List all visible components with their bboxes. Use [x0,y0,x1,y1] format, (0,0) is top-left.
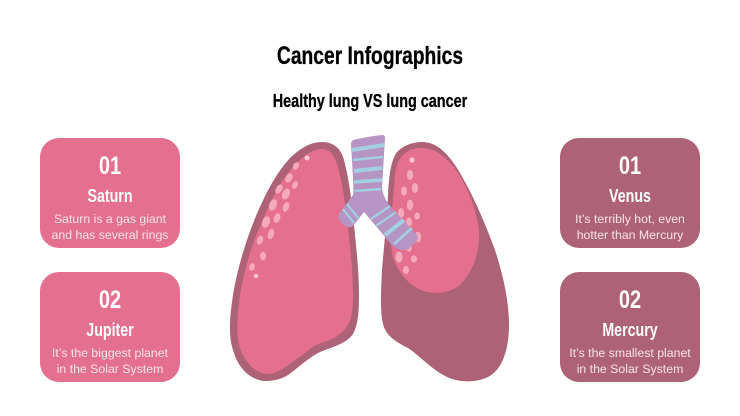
card: Jupiter [40,272,180,382]
number: 02 [619,286,641,314]
card: Venus [560,138,700,248]
description: It’s the smallest planet [569,346,691,360]
title: Cancer Infographics [277,42,463,70]
description [575,212,685,242]
right lung spots [395,157,421,274]
description: It’s terribly hot, even [575,212,685,226]
description [52,346,168,376]
description: It’s the biggest planet [52,346,168,360]
number: 01 [99,152,121,180]
card: Mercury [560,272,700,382]
name: Mercury [602,320,658,340]
number: 02 [99,286,121,314]
description: in the Solar System [577,362,683,376]
description: hotter than Mercury [577,228,683,242]
number: 01 [619,152,641,180]
name: Saturn [87,186,133,206]
diseased right lung [381,142,509,381]
description [569,346,691,376]
healthy left lung [230,142,359,381]
subtitle: Healthy lung VS lung cancer [273,91,467,111]
left lung spots [248,156,310,278]
description: in the Solar System [57,362,163,376]
description [52,212,168,242]
description: Saturn is a gas giant [54,212,166,226]
trachea stripes [343,145,412,244]
description: and has several rings [52,228,168,242]
name: Venus [609,186,651,206]
trachea [339,135,418,250]
card: Saturn [40,138,180,248]
name: Jupiter [86,320,134,340]
